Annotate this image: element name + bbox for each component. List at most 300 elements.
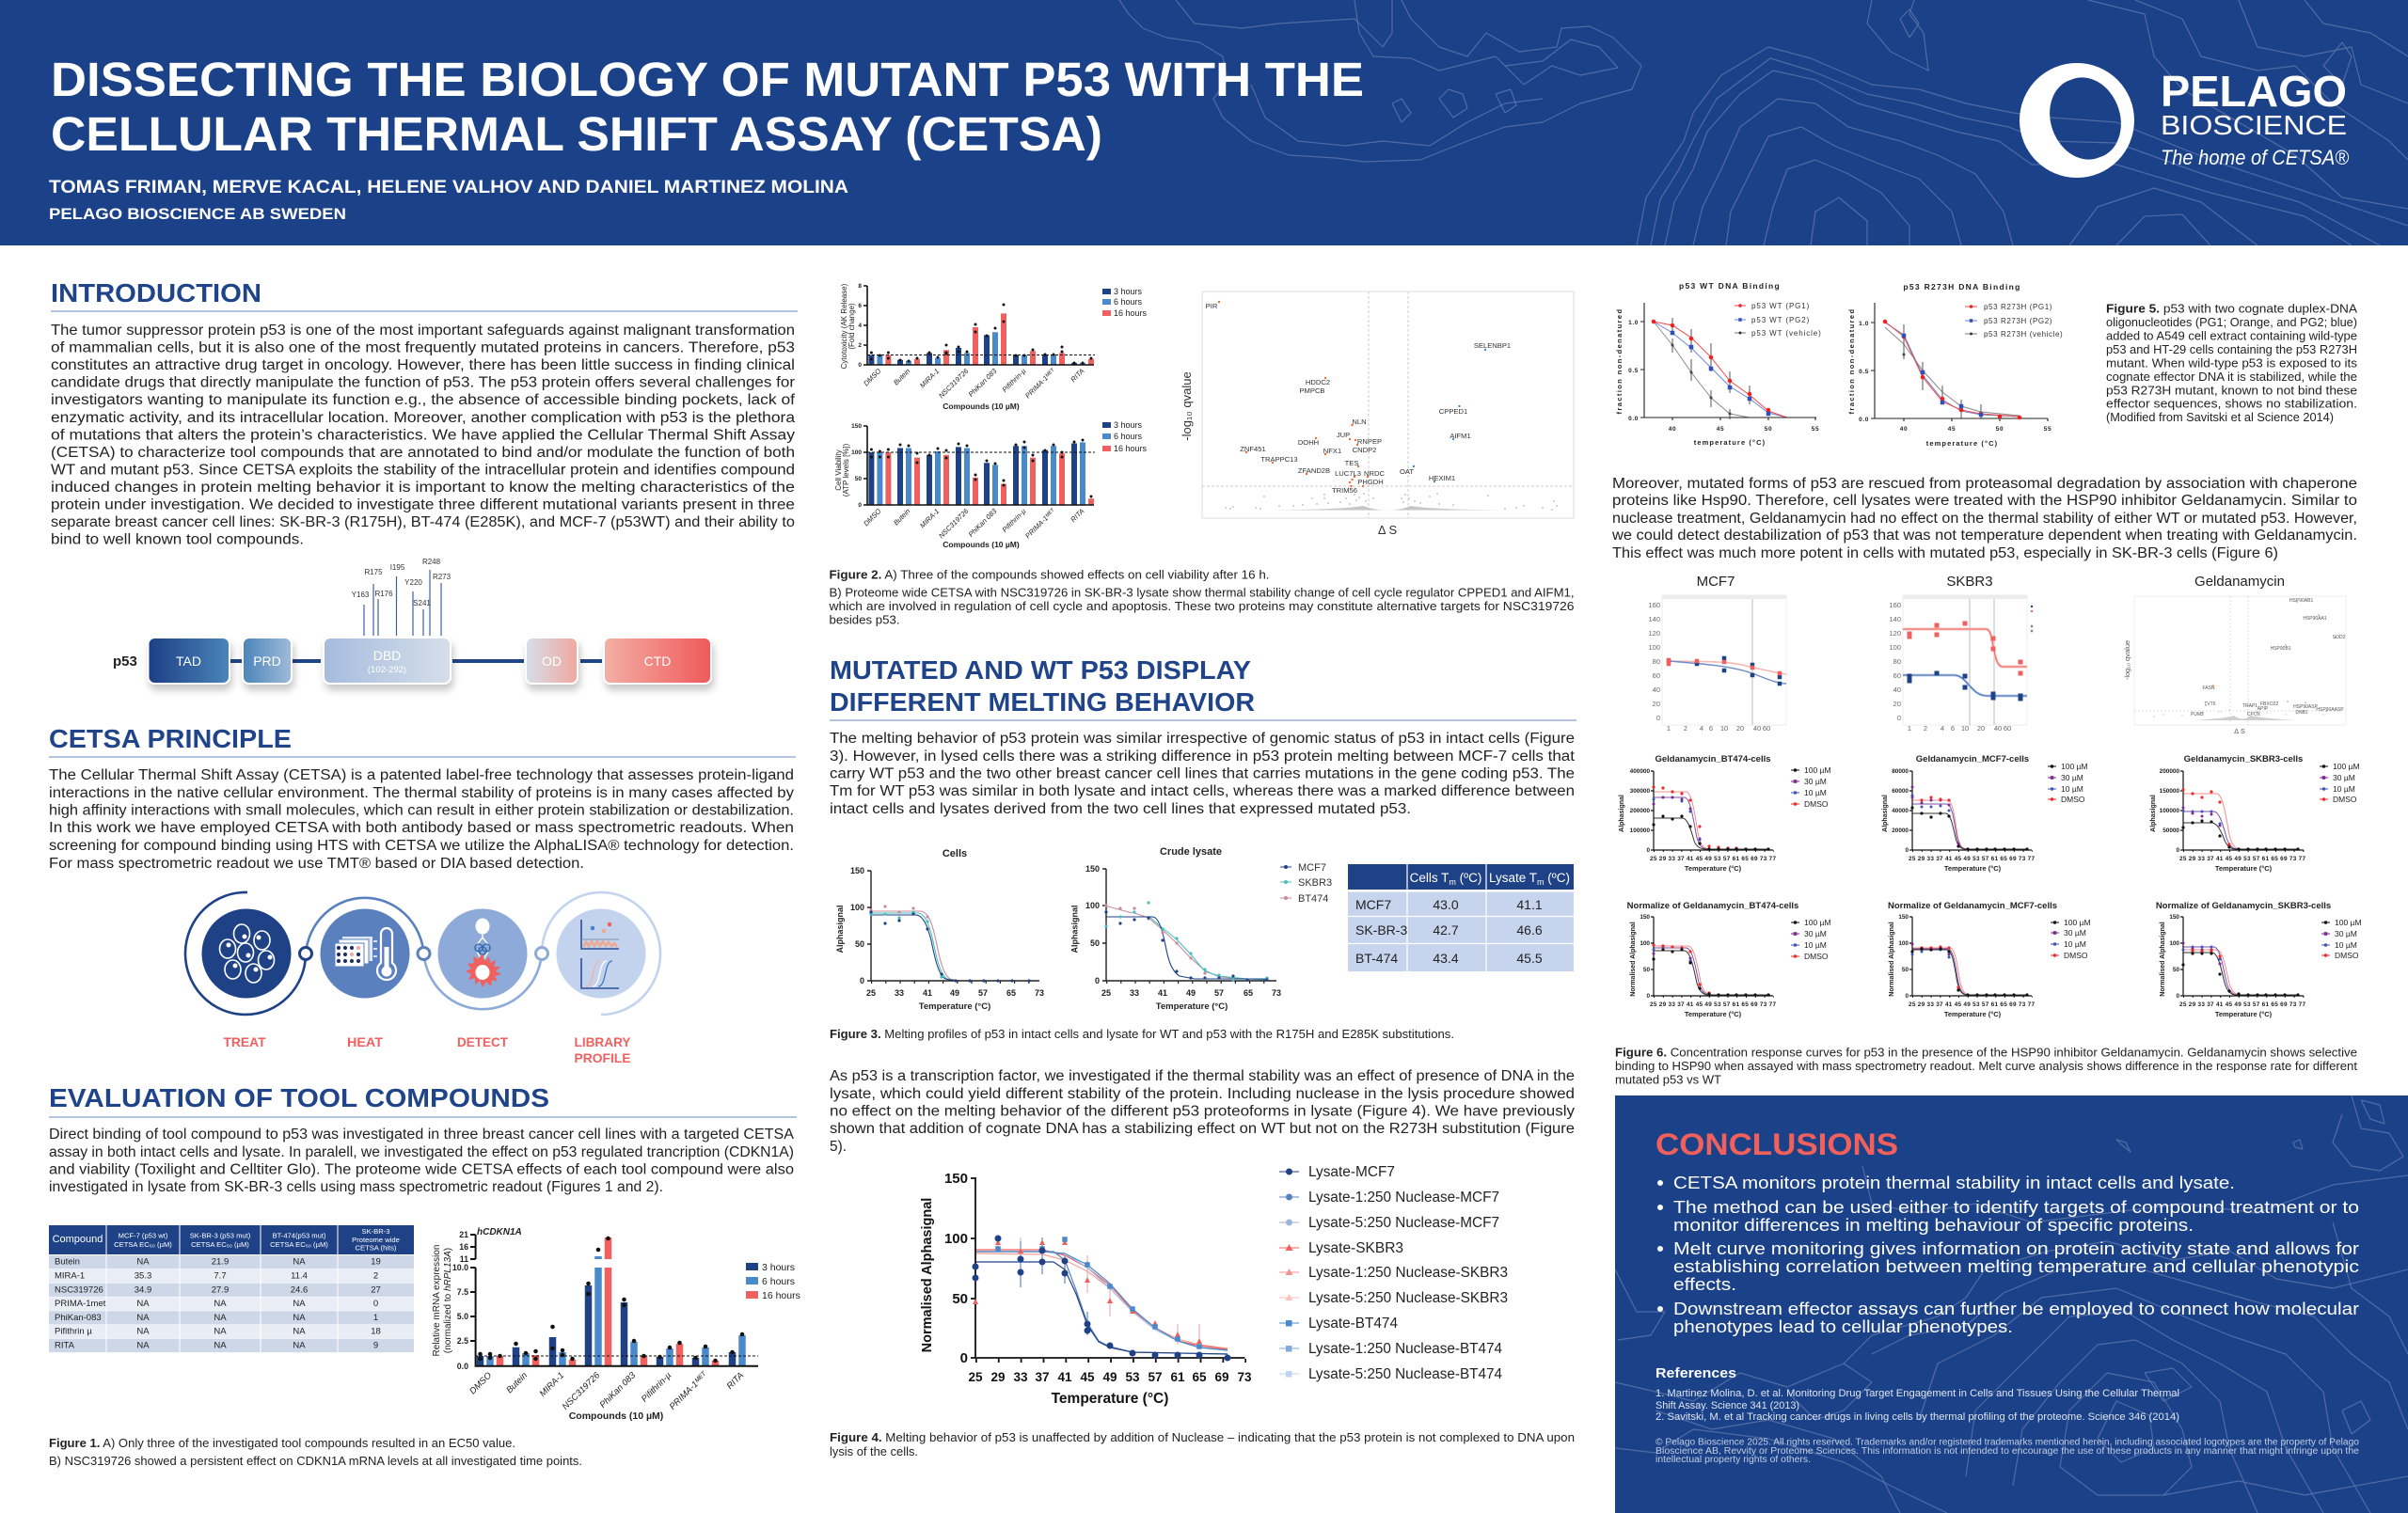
chart: Geldanamycin_SKBR3-cells: Geldanamycin_SKBR3-cells xyxy=(2184,754,2303,764)
table rows: Pifithrin µ xyxy=(55,1326,92,1337)
axis tick labels: 0.0 xyxy=(457,1362,468,1371)
chart: p53 WT DNA binding xyxy=(1615,281,1822,447)
panel: figure 5 DNA binding xyxy=(1611,281,2358,561)
chart: normalized SKBR3-cells: 25 29 33 37 41 45 49 53 57 61 65 69 73 77 xyxy=(2179,1001,2305,1008)
bar chart: cell viability: RITA xyxy=(1069,507,1085,524)
chart: Geldanamycin_BT474-cells: 25 29 33 37 41 45 49 53 57 61 65 69 73 77 xyxy=(1650,856,1776,862)
table header: CETSA EC₅₀ (µM) xyxy=(270,1240,328,1249)
bullet list: conclusions: CETSA monitors protein thermal stability in intact cells and lysate. xyxy=(1673,1174,2235,1192)
chart: p53 WT DNA binding: 1.0 xyxy=(1628,320,1639,326)
table rows: 24.6 xyxy=(291,1284,308,1296)
chart: proteome wide volcano plot: NFX1 xyxy=(1323,447,1341,455)
legend: DMSO xyxy=(1804,799,1829,809)
caption: figure 5: cognate effector DNA it is stabilized, while the xyxy=(2106,370,2357,384)
chart: figure 3 cells melting: 50 xyxy=(855,939,864,949)
axis title: Relative mRNA expression xyxy=(432,1245,442,1356)
bar chart: hCDKN1A expression: hCDKN1A xyxy=(477,1227,522,1237)
chart: normalized MCF7-cells: 0 xyxy=(1905,993,1909,1000)
chart: proteome wide volcano plot: CPPED1 xyxy=(1439,407,1467,416)
chart: p53 R273H DNA binding: fraction non-denatured xyxy=(1847,308,1856,414)
chart: geldanamycin volcano: SOD2 xyxy=(2333,635,2346,640)
bar chart: cell viability: PRIMA-1ᴹᴱᵀ xyxy=(1023,506,1057,540)
chart: figure 3 cells melting: Temperature (°C) xyxy=(919,1001,990,1012)
table rows: NA xyxy=(214,1299,227,1309)
table rows: RITA xyxy=(55,1341,75,1350)
table: melting temperatures: m xyxy=(1449,877,1456,887)
logo: Pelago Bioscience: PELAGO xyxy=(2161,67,2347,116)
legend: 100 µM xyxy=(1804,918,1831,927)
table: melting temperatures: MCF7 xyxy=(1355,897,1391,912)
chart: figure 3 crude lysate melting: 100 xyxy=(1085,901,1100,910)
table rows: NA xyxy=(214,1341,227,1350)
text block: evaluation body: and viability (Toxilight and Celltiter Glo). The proteome wide CETSA effects of each tool compound were also xyxy=(49,1162,794,1177)
caption: figure 5: mutant. When wild-type p53 is exposed to its xyxy=(2106,355,2358,370)
bar chart: cytotoxicity: (Fold change) xyxy=(848,303,856,350)
chart: Geldanamycin_MCF7-cells: 25 29 33 37 41 45 49 53 57 61 65 69 73 77 xyxy=(1909,856,2035,862)
caption: figure 2 xyxy=(828,568,1575,626)
chart: normalized BT474-cells: 0 xyxy=(1646,993,1650,1000)
table rows: 0 xyxy=(373,1299,378,1309)
table rows: NA xyxy=(293,1326,306,1337)
table rows: NA xyxy=(293,1299,306,1309)
bar chart: cytotoxicity: Cytotoxicity (AK Release) xyxy=(840,283,848,369)
chart: proteome wide volcano plot: HDDC2 xyxy=(1306,378,1330,386)
bar chart: cytotoxicity: 0 xyxy=(858,362,862,369)
chart: proteome wide volcano plot: TRIM56 xyxy=(1332,486,1357,495)
text block: CETSA principle body: For mass spectrometric readout we use TMT® based or DIA based detection. xyxy=(49,856,584,872)
legend xyxy=(2321,918,2362,960)
legend: 30 µM xyxy=(2061,773,2083,782)
mutation labels: Y220 xyxy=(404,578,422,587)
bar chart: cell viability: 3 hours xyxy=(1114,420,1143,430)
chart: figure 3 cells melting: 0 xyxy=(860,976,864,985)
table: melting temperatures: 41.1 xyxy=(1516,897,1543,912)
table: melting temperatures: m xyxy=(1537,877,1545,887)
chart: figure 3 crude lysate melting: Alphasignal xyxy=(1070,905,1080,954)
chart: p53 WT DNA binding: 50 xyxy=(1765,426,1772,433)
chart: Geldanamycin_SKBR3-cells: 200000 xyxy=(2160,768,2179,775)
axis labels: 73 xyxy=(1237,1370,1252,1384)
chart: proteome wide volcano plot: PIR xyxy=(1206,302,1218,310)
table rows: 18 xyxy=(371,1326,381,1337)
text block: evaluation body: assay in both intact cells and lysate. In paralell, we investigated the effect on p53 regulated trancription (CDKN1A) xyxy=(49,1144,794,1160)
table: figure 1A compounds xyxy=(49,1225,414,1352)
caption: figure 2: which are involved in regulation of cell cycle and apoptosis. These two proteins may constitute alternative targets for NSC319726 xyxy=(828,599,1575,613)
chart: figure 3 cells melting: Alphasignal xyxy=(835,905,845,954)
table rows: NA xyxy=(214,1326,227,1337)
text block: melting behavior body: 3). However, in lysed cells there was a striking difference in p53 protein melting between MCF-7 cells that xyxy=(830,749,1576,764)
bar chart: cell viability: Pifithrin-µ xyxy=(1001,507,1027,534)
chart: Geldanamycin_MCF7-cells xyxy=(1882,754,2088,873)
panel: introduction xyxy=(51,278,798,684)
table rows: NSC319726 xyxy=(55,1284,103,1296)
bar chart: cytotoxicity: MIRA-1 xyxy=(918,367,941,389)
category labels: RITA xyxy=(725,1370,746,1392)
chart: figure 3 crude lysate melting: Temperature (°C) xyxy=(1156,1001,1228,1012)
chart: proteome wide volcano plot: DOHH xyxy=(1298,438,1319,447)
text block: geldanamycin paragraph: proteins like Hsp90. Therefore, cell lysates were treated with the HSP90 inhibitor Geldanamycin. Similar to xyxy=(1612,493,2357,509)
chart: figure 3 crude lysate melting: 73 xyxy=(1272,988,1281,998)
legend: 6 hours xyxy=(762,1276,795,1287)
chart: geldanamycin volcano: HSP90AA1 xyxy=(2303,616,2327,622)
legend: 30 µM xyxy=(2064,928,2086,938)
text block: geldanamycin paragraph: we could detect destabilization of p53 that was not temperature dependent when treating with Geldanamycin. xyxy=(1611,528,2357,544)
text block: geldanamycin paragraph: This effect was much more potent in cells with mutated p53, especially in SK-BR-3 cells (Figure 6) xyxy=(1612,545,2278,561)
chart: p53 R273H DNA binding: 50 xyxy=(1996,426,2004,433)
chart: geldanamycin volcano: HSP90ASP xyxy=(2293,704,2319,710)
axis labels: 100 xyxy=(944,1231,968,1247)
legend: BT474 xyxy=(1298,893,1328,905)
chart: proteome wide volcano plot: -log₁₀ qvalue xyxy=(1180,371,1194,441)
axis tick labels: 7.5 xyxy=(457,1287,468,1297)
icon: treat cells xyxy=(201,908,292,999)
mutation labels: I195 xyxy=(390,563,405,572)
chart: normalized BT474-cells: 100 xyxy=(1640,940,1650,947)
legend: 100 µM xyxy=(2335,918,2362,927)
chart: figure 3 cells melting: Cells xyxy=(943,848,967,859)
panel: evaluation of tool compounds xyxy=(49,1083,800,1468)
chart: normalized SKBR3-cells: Normalize of Geldanamycin_SKBR3-cells xyxy=(2156,901,2331,911)
bar chart: cell viability: Butein xyxy=(892,507,911,527)
chart: normalized SKBR3-cells: 0 xyxy=(2176,993,2179,1000)
chart: geldanamycin volcano: TVT6 xyxy=(2204,701,2216,707)
chart: Geldanamycin_SKBR3-cells: Alphasignal xyxy=(2150,795,2157,832)
chart: p53 WT DNA binding: p53 WT DNA Binding xyxy=(1679,281,1781,291)
axis labels: 61 xyxy=(1170,1370,1185,1384)
legend: 100 µM xyxy=(2064,918,2091,927)
plot: SKBR3 concentration response: 2 xyxy=(1924,724,1927,733)
chart: proteome wide volcano plot: AIFM1 xyxy=(1450,432,1471,440)
chart: figure 3 crude lysate melting: 65 xyxy=(1244,988,1253,998)
chart: figure 3 cells melting: 65 xyxy=(1006,988,1016,998)
text block: introduction body: enzymatic activity, and its intracellular location. Moreover, another complication with p53 is the plethora xyxy=(51,410,795,426)
panel: figure 6 geldanamycin xyxy=(1615,574,2362,1087)
caption: figure 5: added to A549 cell extract containing wild-type xyxy=(2106,329,2357,342)
chart: figure 3 crude lysate melting: 57 xyxy=(1214,988,1224,998)
table rows: NA xyxy=(293,1256,306,1268)
title: DISSECTING THE BIOLOGY OF MUTANT P53 WITH THE xyxy=(51,53,1364,106)
text block: evaluation body: investigated in lysate from SK-BR-3 cells using mass spectrometric readout (Figures 1 and 2). xyxy=(49,1179,663,1195)
affiliation: PELAGO BIOSCIENCE AB SWEDEN xyxy=(49,205,346,223)
legend: 10 µM xyxy=(1804,940,1827,950)
text block: nuclease paragraph xyxy=(830,1068,1575,1155)
chart: geldanamycin volcano: FASN xyxy=(2202,686,2215,691)
bullet list: conclusions: Melt curve monitoring gives information on protein activity state and allows for xyxy=(1673,1239,2359,1258)
domain labels: PRD xyxy=(253,654,281,669)
chart: p53 WT DNA binding: temperature (°C) xyxy=(1694,438,1766,447)
heading: mutated and WT p53: MUTATED AND WT P53 DISPLAY xyxy=(830,655,1251,685)
bullet list: conclusions xyxy=(1660,1174,2359,1336)
chart: figure 3 cells melting: 41 xyxy=(923,988,932,998)
axis tick labels: 11 xyxy=(460,1254,468,1264)
caption: figure 5: p53 and HT-29 cells containing the p53 R273H xyxy=(2106,342,2357,356)
text block: evaluation body: Direct binding of tool compound to p53 was investigated in three breast cancer cell lines with a targeted CETSA xyxy=(49,1127,795,1143)
workflow labels: LIBRARY xyxy=(574,1034,631,1049)
mutation labels: R248 xyxy=(422,558,441,566)
bar chart: cell viability: 0 xyxy=(858,502,862,509)
chart: normalized MCF7-cells: 100 xyxy=(1898,940,1909,947)
text block: nuclease paragraph: 5). xyxy=(830,1139,847,1155)
chart: Geldanamycin_MCF7-cells: Geldanamycin_MCF7-cells xyxy=(1916,754,2029,764)
table rows: 35.3 xyxy=(135,1271,151,1281)
legend: 10 µM xyxy=(2064,939,2086,949)
chart: figure 3 crude lysate melting: 33 xyxy=(1130,988,1139,998)
chart: p53 WT DNA binding: 45 xyxy=(1717,426,1724,433)
category labels: DMSO xyxy=(467,1370,495,1396)
text block: melting behavior body xyxy=(830,731,1576,817)
plot: SKBR3 concentration response: 10 xyxy=(1961,724,1969,733)
plot: MCF7 concentration response: 2 xyxy=(1684,724,1687,733)
legend xyxy=(1965,303,2063,339)
heading: CETSA principle: CETSA PRINCIPLE xyxy=(49,724,292,753)
axis tick labels: 5.0 xyxy=(457,1312,468,1321)
workflow labels: TREAT xyxy=(224,1034,266,1049)
axis labels: 53 xyxy=(1125,1370,1140,1384)
table rows: 34.9 xyxy=(135,1284,151,1296)
text block: CETSA principle body: high affinity interactions with small molecules, which can result in either protein stabilization or destabilization. xyxy=(49,803,794,818)
axis labels: 25 xyxy=(968,1370,983,1384)
axis labels: 29 xyxy=(990,1370,1006,1384)
references: 1. Martinez Molina, D. et al. Monitoring Drug Target Engagement in Cells and Tissues Using the Cellular Thermal xyxy=(1656,1388,2179,1399)
chart: normalized MCF7-cells: 25 29 33 37 41 45 49 53 57 61 65 69 73 77 xyxy=(1909,1001,2035,1008)
legend: p53 R273H (vehicle) xyxy=(1984,330,2063,339)
text block: introduction body: of mutations that alters the protein’s characteristics. We have applied the Cellular Thermal Shift Assay xyxy=(51,427,795,443)
heading: evaluation of tool compounds: EVALUATION OF TOOL COMPOUNDS xyxy=(49,1083,549,1112)
bar chart: cell viability: PhiKan 083 xyxy=(967,506,999,539)
table header: Proteome wide xyxy=(352,1236,400,1244)
legend: DMSO xyxy=(2064,951,2088,960)
chart: Geldanamycin_BT474-cells: 0 xyxy=(1646,847,1650,854)
table rows: 27 xyxy=(371,1284,381,1296)
chart: p53 R273H DNA binding xyxy=(1847,282,2063,448)
bar chart: cytotoxicity: DMSO xyxy=(862,367,883,387)
plot: MCF7 concentration response: 4 xyxy=(1700,724,1703,733)
bullet list: conclusions: monitor differences in melting behaviour of specific proteins. xyxy=(1673,1216,2194,1235)
chart: proteome wide volcano plot: JUP xyxy=(1337,431,1350,439)
heading: mutated and WT p53 xyxy=(830,655,1255,717)
text block: geldanamycin paragraph xyxy=(1611,476,2357,561)
chart: Geldanamycin_BT474-cells: Temperature (°C) xyxy=(1685,864,1742,873)
caption: figure 6: mutated p53 vs WT xyxy=(1615,1072,1721,1087)
plot: MCF7 concentration response: 20 xyxy=(1736,724,1744,733)
axis labels: 33 xyxy=(1013,1370,1028,1384)
authors: TOMAS FRIMAN, MERVE KACAL, HELENE VALHOV AND DANIEL MARTINEZ MOLINA xyxy=(49,178,848,197)
chart: Geldanamycin_BT474-cells: 200000 xyxy=(1630,808,1650,814)
plot: SKBR3 concentration response: 160 xyxy=(1889,601,1901,609)
workflow labels: DETECT xyxy=(457,1034,508,1049)
table rows: 19 xyxy=(371,1256,381,1268)
mutation labels: Y163 xyxy=(352,591,370,599)
chart: p53 WT DNA binding: fraction non-denatured xyxy=(1615,308,1624,414)
chart: normalized MCF7-cells: Normalised Alphasignal xyxy=(1889,922,1895,997)
text block: introduction body: WT and mutant p53. Since CETSA exploits the stability of the intracellular protein and identifies compound xyxy=(51,462,795,478)
diagram: CETSA workflow xyxy=(185,892,660,1065)
table: melting temperatures: (ºC) xyxy=(1456,871,1481,885)
table rows: 21.9 xyxy=(212,1256,229,1268)
legend: p53 WT (PG1) xyxy=(1751,302,1810,310)
table rows: PRIMA-1met xyxy=(55,1299,106,1309)
bullet list: conclusions: Downstream effector assays can further be employed to connect how molecular xyxy=(1673,1300,2359,1318)
table rows: 11.4 xyxy=(291,1271,308,1281)
chart: normalized BT474-cells: 50 xyxy=(1643,967,1650,973)
table: melting temperatures: 46.6 xyxy=(1516,922,1543,938)
table header: CETSA (hits) xyxy=(356,1243,397,1253)
legend: Lysate-1:250 Nuclease-SKBR3 xyxy=(1308,1265,1508,1281)
chart: normalized SKBR3-cells xyxy=(2156,901,2362,1018)
caption: figure 1: Figure 1. A) Only three of the investigated tool compounds resulted in an EC50 value. xyxy=(49,1436,515,1450)
chart: Geldanamycin_MCF7-cells: 60000 xyxy=(1892,788,1909,795)
chart: Geldanamycin_SKBR3-cells: 0 xyxy=(2176,847,2179,854)
plot: MCF7 concentration response: 80 xyxy=(1653,657,1660,666)
caption: figure 4: Figure 4. Melting behavior of p53 is unaffected by addition of Nuclease – indicating that the p53 protein is not complexed to DNA upon xyxy=(830,1430,1575,1444)
chart: geldanamycin volcano: DNB1 xyxy=(2295,710,2308,716)
bullet list: conclusions: phenotypes lead to cellular phenotypes. xyxy=(1673,1317,2013,1336)
table rows: NA xyxy=(293,1313,306,1323)
plot: SKBR3 concentration response: 80 xyxy=(1893,657,1901,666)
bar chart: cell viability: MIRA-1 xyxy=(918,507,941,529)
chart: Geldanamycin_MCF7-cells: 0 xyxy=(1905,847,1909,854)
text block: introduction body: bind to well known tool compounds. xyxy=(51,532,304,548)
legend: 10 µM xyxy=(2335,940,2357,950)
legend: Lysate-5:250 Nuclease-MCF7 xyxy=(1308,1215,1499,1231)
category labels: PhiKan 083 xyxy=(598,1370,639,1411)
bar chart: cell viability xyxy=(834,420,1148,549)
chart: figure 3 crude lysate melting: 41 xyxy=(1158,988,1167,998)
mutation labels: R175 xyxy=(364,568,383,576)
panel: CETSA principle xyxy=(49,724,796,1065)
chart: normalized MCF7-cells: 50 xyxy=(1902,967,1909,973)
chart: normalized BT474-cells: 25 29 33 37 41 45 49 53 57 61 65 69 73 77 xyxy=(1650,1001,1776,1008)
heading: introduction: INTRODUCTION xyxy=(51,278,261,307)
chart: proteome wide volcano plot: PMPCB xyxy=(1299,386,1325,395)
legend: Lysate-5:250 Nuclease-BT474 xyxy=(1308,1366,1502,1382)
copyright notice: © Pelago Bioscience 2025. All rights reserved. Trademarks and/or registered trademarks mentioned herein, including associated logotypes are the property of Pelago xyxy=(1656,1437,2359,1448)
legend: DMSO xyxy=(2335,951,2359,960)
domain labels: (102-292) xyxy=(368,665,406,675)
table: melting temperatures: 43.4 xyxy=(1433,951,1459,966)
references xyxy=(1656,1365,2179,1423)
title xyxy=(51,53,1364,161)
chart: proteome wide volcano plot: SELENBP1 xyxy=(1474,341,1511,350)
bar chart: hCDKN1A expression xyxy=(432,1227,800,1422)
caption: figure 5: oligonucleotides (PG1; Orange, and PG2; blue) xyxy=(2106,315,2357,329)
text block: introduction body: of mammalian cells, but it is also one of the most frequently mutated proteins in cancers. Therefore, p53 xyxy=(51,340,795,356)
table header: SK-BR-3 xyxy=(362,1227,389,1236)
bullet list: conclusions: effects. xyxy=(1673,1275,1736,1294)
chart: geldanamycin volcano: CPOX xyxy=(2247,712,2261,717)
legend xyxy=(1735,302,1822,338)
plot: MCF7 concentration response: 160 xyxy=(1648,601,1660,609)
legend xyxy=(2320,762,2360,804)
chart: figure 3 cells melting: 57 xyxy=(978,988,988,998)
bar chart: cell viability: 16 hours xyxy=(1114,444,1148,453)
icon: heat plate and thermometer xyxy=(320,908,410,999)
icon: library profile charts xyxy=(557,908,645,999)
chart: proteome wide volcano plot: PHGDH xyxy=(1357,478,1384,486)
chart: normalized BT474-cells: Temperature (°C) xyxy=(1685,1010,1742,1018)
axis labels xyxy=(920,1171,1252,1407)
chart: p53 R273H DNA binding: p53 R273H DNA Binding xyxy=(1903,282,2021,292)
table: melting temperatures: SK-BR-3 xyxy=(1355,922,1407,938)
axis tick labels: 21 xyxy=(459,1230,468,1239)
bar chart: cytotoxicity: 8 xyxy=(858,283,862,290)
bar chart: cytotoxicity: Compounds (10 µM) xyxy=(943,402,1020,411)
caption: figure 1: B) NSC319726 showed a persistent effect on CDKN1A mRNA levels at all investigated time points. xyxy=(49,1454,582,1468)
legend: 30 µM xyxy=(2333,773,2355,782)
table header: SK-BR-3 (p53 mut) xyxy=(190,1232,251,1239)
chart: proteome wide volcano plot: OAT xyxy=(1400,467,1414,476)
chart: Geldanamycin_MCF7-cells: 40000 xyxy=(1892,808,1909,814)
chart: geldanamycin volcano: -log₁₀ qvalue xyxy=(2123,640,2131,680)
text block: melting behavior body: intact cells and lysates derived from the two cell lines that expressed mutated p53. xyxy=(830,801,1411,817)
domain labels xyxy=(176,648,671,675)
text block: CETSA principle body xyxy=(49,767,794,872)
panel: mutated and WT p53 melting behavior xyxy=(830,655,1576,1458)
text block: melting behavior body: The melting behavior of p53 protein was similar irrespective of genomic status of p53 in intact cells (Figure xyxy=(830,731,1575,747)
legend: Lysate-MCF7 xyxy=(1308,1164,1395,1180)
category labels: MIRA-1 xyxy=(538,1370,566,1399)
mutation labels: S241 xyxy=(413,599,431,607)
bar chart: cytotoxicity: PhiKan 083 xyxy=(967,366,999,399)
plot: MCF7 concentration response: 60 xyxy=(1763,724,1770,733)
legend xyxy=(1279,1164,1508,1382)
bar chart: cell viability: 50 xyxy=(855,476,862,482)
chart: geldanamycin volcano: HSP90AASP xyxy=(2316,707,2344,713)
chart: geldanamycin volcano: APIP xyxy=(2258,706,2269,712)
plot: SKBR3 concentration response: 140 xyxy=(1889,615,1901,623)
bar chart: cytotoxicity: Butein xyxy=(892,367,911,386)
chart: normalized MCF7-cells: Normalize of Geldanamycin_MCF7-cells xyxy=(1888,901,2057,911)
axis title: (normalized to hRPL13A) xyxy=(443,1248,453,1353)
axis labels: 49 xyxy=(1102,1370,1117,1384)
chart: proteome wide volcano plot: ZNF451 xyxy=(1240,445,1266,453)
chart: proteome wide volcano plot: LUC7L3 xyxy=(1335,469,1361,478)
legend xyxy=(1791,765,1831,809)
caption: figure 2: Figure 2. A) Three of the compounds showed effects on cell viability after 16 h. xyxy=(830,568,1270,581)
chart: proteome wide volcano plot: NLN xyxy=(1352,418,1367,426)
bar chart: cell viability: NSC319726 xyxy=(937,506,971,540)
table: melting temperatures: 45.5 xyxy=(1516,951,1543,966)
heading: conclusions: CONCLUSIONS xyxy=(1656,1127,1898,1161)
chart: p53 R273H DNA binding: 1.0 xyxy=(1859,321,1869,327)
chart: figure 3 cells melting: 33 xyxy=(895,988,904,998)
legend: Lysate-BT474 xyxy=(1308,1316,1398,1332)
plot: SKBR3 concentration response: 40 xyxy=(1893,686,1901,694)
table rows: 27.9 xyxy=(212,1284,229,1296)
text block: introduction body: investigators wanting to manipulate its function e.g., the absence of accessible binding pockets, lack of xyxy=(51,392,796,408)
bullet list: conclusions: The method can be used either to identify targets of compound treatment or to xyxy=(1673,1198,2359,1217)
copyright notice: intellectual property rights of others. xyxy=(1656,1455,1811,1465)
bar chart: cytotoxicity: PRIMA-1ᴹᴱᵀ xyxy=(1023,366,1057,400)
plot: SKBR3 concentration response: 120 xyxy=(1889,629,1901,638)
plot: SKBR3 concentration response xyxy=(1889,574,2032,733)
bar chart: cell viability: 100 xyxy=(851,449,862,456)
table: melting temperatures: (ºC) xyxy=(1545,871,1570,885)
chart: proteome wide volcano plot: ZFAND2B xyxy=(1298,466,1330,475)
chart: normalized SKBR3-cells: 50 xyxy=(2173,967,2179,973)
chart: figure 3 cells melting: 73 xyxy=(1035,988,1044,998)
table rows: 2 xyxy=(373,1271,378,1281)
diagram: p53 domain map xyxy=(113,558,711,684)
plot: MCF7 concentration response: 1 xyxy=(1667,724,1671,733)
table header: Compound xyxy=(53,1234,103,1245)
legend xyxy=(2048,762,2088,804)
table rows: NA xyxy=(293,1341,306,1350)
text block: introduction body: The tumor suppressor protein p53 is one of the most important safeguards against malignant transformation xyxy=(51,323,795,339)
header banner xyxy=(0,0,2408,245)
plot: MCF7 concentration response: 0 xyxy=(1656,714,1660,722)
table rows: 9 xyxy=(373,1341,378,1350)
